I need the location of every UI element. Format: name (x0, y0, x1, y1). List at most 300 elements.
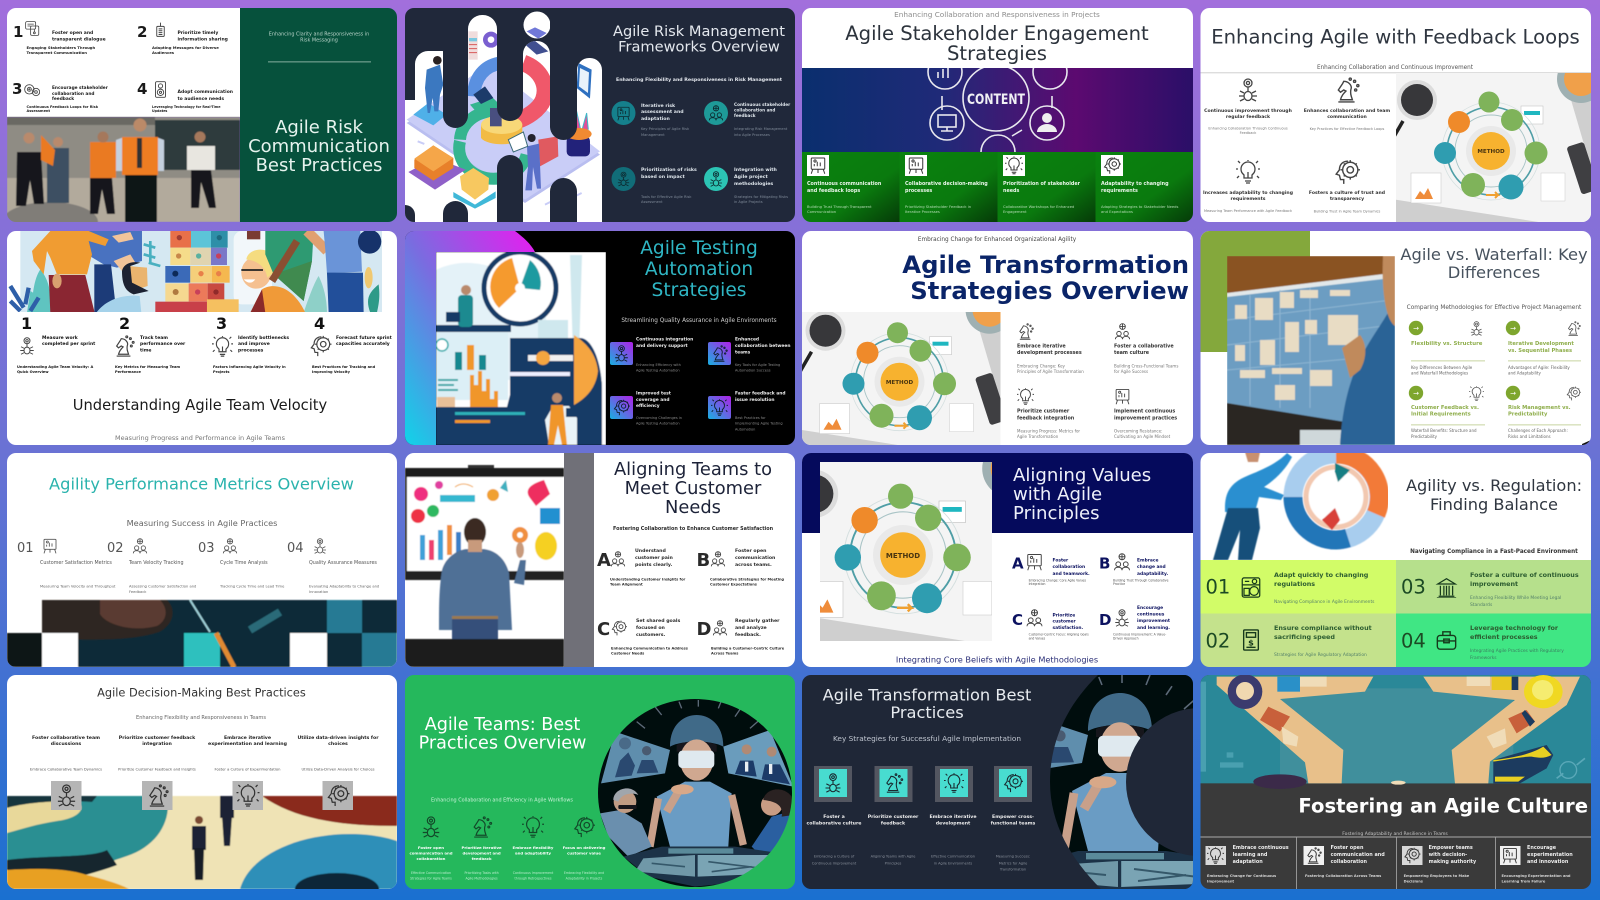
item 2: development and (462, 850, 501, 856)
title: Agile Transformation Best (823, 686, 1031, 704)
item 4 (1500, 845, 1573, 884)
title: Agile vs. Waterfall: Key (1400, 245, 1588, 264)
item 3: Predictability (1411, 434, 1438, 439)
item C: Customer-Centric Focus: Aligning Goals (1029, 632, 1089, 636)
item 3: → (1413, 390, 1419, 398)
item 1: Building Trust Through Transparent (807, 205, 872, 209)
item 2: Aligning Teams with Agile (871, 854, 915, 858)
item 3: Assessment (26, 109, 50, 113)
item 4 (311, 314, 393, 374)
item 4: Adapting Strategies to Stakeholder Needs (1101, 205, 1178, 209)
item 4: Utilize data-driven insights for (297, 735, 379, 741)
metric 04 (287, 539, 379, 594)
item 1: Embrace continuous (1233, 845, 1289, 851)
item 1: and Waterfall Methodologies (1411, 370, 1468, 376)
item D: Regularly gather (735, 618, 780, 624)
item 1: Embrace iterative (1017, 344, 1066, 350)
item D (1099, 605, 1170, 640)
item 3: Decisions (1404, 880, 1423, 884)
item 2: Fostering Collaboration Across Teams (1305, 874, 1381, 878)
item 2 (118, 735, 196, 810)
subtitle: Fostering Adaptability and Resilience in Teams (1342, 831, 1448, 837)
item 4 (1506, 386, 1581, 439)
item 2: collaboration (1331, 859, 1367, 865)
item 2: information sharing (178, 36, 228, 42)
title: Principles (1013, 503, 1100, 524)
item 1: Embracing Change: Key (1017, 364, 1066, 368)
item 1: Embracing a Culture of (814, 854, 855, 858)
item A: Understand (635, 548, 666, 554)
item 4: Cultivating an Agile Mindset (1114, 434, 1171, 439)
item 1 (1204, 79, 1292, 135)
item 4: → (1510, 390, 1516, 398)
item 2: performance over (140, 341, 186, 347)
item 1: Strategies for Agile Teams (410, 876, 452, 880)
photo: planning board (1227, 256, 1395, 445)
item 4 (704, 167, 788, 204)
illustration: analytics dashboard (436, 252, 606, 445)
item D: continuous (1137, 612, 1165, 618)
item A: Understanding Customer Insights for (610, 578, 686, 582)
item A: Foster (1052, 558, 1069, 564)
item 1: Flexibility vs. Structure (1411, 341, 1483, 347)
item 4 (297, 735, 379, 810)
item D: D (1099, 611, 1111, 629)
item D: feedback. (735, 632, 761, 638)
photo: man at whiteboard (405, 465, 564, 667)
title: Strategies (947, 42, 1047, 65)
item 1: Continuous communication (807, 181, 882, 187)
item 02 (1200, 614, 1396, 668)
item 03: improvement (1470, 580, 1518, 588)
item 1: Foster collaborative team (32, 735, 100, 741)
item 4: Focus on delivering (563, 845, 606, 850)
title: Agile Risk Management (613, 23, 785, 40)
item 3 (1402, 845, 1477, 884)
item 1: Iterative risk (641, 103, 676, 109)
photo: method diagram: METHOD (886, 552, 920, 560)
item 4 (991, 766, 1035, 872)
item 1: transparent dialogue (52, 36, 106, 42)
item B: change and (1137, 564, 1166, 570)
item 3: Effective Communication (931, 854, 975, 858)
item 4: Predictability (1508, 412, 1548, 418)
item 2: Principles (885, 862, 902, 866)
illustration: team with blocks (10, 230, 382, 313)
item 3 (929, 766, 977, 866)
item 3: Prioritize customer (1017, 408, 1070, 414)
item 2: Advantages of Agile: Flexibility (1508, 365, 1570, 370)
metric 02: 02 (107, 541, 124, 556)
item 3: Embrace iterative (224, 735, 271, 741)
item 2: feedback (881, 820, 906, 826)
panel: Aligning Teams to Meet Customer Needs (405, 453, 795, 667)
item 1: 1 (21, 314, 32, 333)
item 1: Engaging Stakeholders Through (26, 45, 96, 50)
item 2: Adapting Messages for Diverse (152, 45, 219, 50)
title: Frameworks Overview (618, 38, 780, 56)
metric 01: 01 (17, 541, 34, 556)
item 01: 01 (1206, 576, 1230, 598)
item 3: and adaptability (515, 850, 551, 856)
item D: Encourage (1137, 605, 1163, 611)
green columns (802, 152, 1194, 222)
item 2: Foster a collaborative (1114, 344, 1174, 350)
title: Strategies Overview (910, 276, 1189, 305)
panel: Enhancing Agile with Feedback Loops (1200, 8, 1591, 222)
item 2 (1506, 321, 1581, 376)
title: Meet Customer (625, 478, 762, 499)
title: Agile Testing (640, 238, 758, 259)
item 3: 3 (12, 80, 22, 98)
item 4: Overcoming Resistance: (1114, 428, 1162, 434)
item 4: issue resolution (735, 397, 775, 403)
item D: D (696, 619, 711, 640)
item 3: Improved test (636, 390, 671, 396)
item B: Customer Expectations (710, 582, 757, 586)
title: Aligning Values (1013, 465, 1151, 486)
item 4: customer value (567, 850, 601, 856)
item 4: methodologies (734, 181, 773, 187)
item 3: Continuous Feedback Loops for Risk (26, 105, 99, 109)
item 1 (807, 766, 861, 866)
item 1: completed per sprint (42, 341, 96, 347)
gray band (564, 453, 594, 667)
title: Enhancing Agile with Feedback Loops (1211, 26, 1580, 48)
title: Understanding Agile Team Velocity (73, 397, 328, 414)
item 04: efficient processes (1470, 633, 1538, 641)
item A: customer pain (635, 555, 673, 561)
subtitle: Enhancing Collaboration and Continuous Improvement (1317, 65, 1474, 71)
item 3: Customer Feedback vs. (1411, 405, 1479, 411)
item 1: → (1413, 324, 1419, 332)
title: Aligning Teams to (614, 459, 772, 480)
item 04: 04 (1401, 630, 1426, 652)
item 03 (1396, 560, 1591, 614)
item 3: Empower teams (1429, 845, 1473, 851)
item 4 (137, 80, 233, 113)
photo: method diagram: METHOD (886, 380, 913, 386)
item B: communication (735, 555, 775, 561)
item 1: Foster open and (52, 30, 93, 36)
item 3: Agile Transformation (1017, 434, 1059, 439)
item 3: Encourage stakeholder (52, 85, 109, 91)
item D: and learning. (1137, 625, 1170, 631)
item B: B (1099, 554, 1110, 572)
title: Needs (665, 497, 721, 518)
item A: and teamwork. (1052, 571, 1090, 577)
item C: C (597, 619, 610, 640)
item 2: Prioritize iterative (461, 845, 502, 850)
item 3: 3 (216, 314, 227, 333)
item B (696, 548, 785, 586)
item 2: collaboration and (734, 108, 775, 112)
item 3: Factors Influencing Agile Velocity in (213, 365, 286, 369)
item 03: 03 (1401, 576, 1426, 598)
item 4: Updates (152, 109, 167, 113)
metric 04: Quality Assurance Measures (309, 560, 377, 566)
gradient shape (405, 231, 535, 445)
panel: Agile Testing Automation Strategies (405, 231, 795, 445)
item A: Integration (1029, 582, 1045, 586)
panel: Agile Transformation Best Practices (802, 623, 1278, 900)
item 3: requirements (1230, 196, 1266, 202)
panel: Agile Risk Communication Best Practices (2, 8, 397, 242)
title: Agility Performance Metrics Overview (49, 474, 354, 494)
item 3 (612, 167, 697, 204)
item 4 (563, 817, 606, 880)
item B: adaptability. (1137, 571, 1168, 577)
item 1 (13, 22, 106, 55)
metric 04: Innovation (309, 590, 328, 594)
metric 02: Feedback (129, 590, 147, 594)
item 4: 4 (314, 314, 325, 333)
item 2 (1304, 78, 1390, 131)
item 4: Adaptability to changing (1101, 181, 1169, 187)
item 2: Integrating Risk Management (734, 127, 788, 131)
item 1: Improvement (1207, 880, 1234, 884)
item 01: Adapt quickly to changing (1274, 571, 1369, 579)
item 03: Enhancing Flexibility While Meeting Legal (1470, 595, 1561, 601)
item 2: collaboration between (735, 343, 791, 349)
subtitle: Key Strategies for Successful Agile Implementation (833, 734, 1021, 743)
item 2 (1114, 324, 1178, 374)
item 3 (1409, 386, 1485, 439)
item 2: feedback (472, 856, 492, 861)
subtitle: Streamlining Quality Assurance in Agile Environments (621, 318, 777, 324)
item D: Driven Approach (1113, 636, 1139, 640)
item 3: collaboration and (52, 91, 94, 97)
item 4: transparency (1330, 196, 1364, 202)
subtitle: Risk Messaging (300, 38, 338, 44)
item D (696, 618, 785, 656)
item A: Embracing Change: Core Agile Values (1029, 578, 1087, 582)
title: Differences (1448, 263, 1540, 282)
item 4: Encourage (1527, 845, 1557, 851)
item 4: experimentation (1527, 852, 1573, 858)
photo: team in orange vests (7, 116, 240, 222)
green accent block (1200, 231, 1310, 352)
item 1: Feedback (1240, 131, 1257, 135)
item 4: Best Practices for Tracking and (312, 365, 376, 369)
item C: Customer Needs (611, 652, 644, 656)
item 3: making authority (1429, 859, 1477, 865)
item 3: efficiency (636, 403, 660, 409)
item 1: Effective Communication (411, 871, 451, 875)
item 3: Tools for Effective Agile Risk (640, 195, 692, 199)
item 2: processes (905, 188, 932, 194)
item 2: Key Metrics for Measuring Team (115, 365, 180, 369)
item C: satisfaction. (1052, 625, 1084, 631)
item 1: Foster a (823, 814, 845, 820)
item 2: integration (142, 741, 172, 747)
item 3: Increases adaptability to changing (1203, 190, 1293, 196)
item C: focused on (636, 625, 665, 631)
illustration: person and ring (1213, 452, 1380, 560)
item 1 (17, 314, 96, 374)
item 3: needs (1003, 188, 1019, 194)
item 3: Initial Requirements (1411, 412, 1471, 418)
item 1 (1017, 324, 1084, 374)
item 1: Understanding Agile Team Velocity: A (17, 365, 93, 369)
item 4: Forecast future sprint (336, 335, 393, 341)
item 04: Leverage technology for (1470, 624, 1559, 632)
photo: method diagram: METHOD (1477, 149, 1505, 155)
item 01: regulations (1274, 580, 1315, 588)
item 2 (905, 155, 988, 214)
photo: method diagram (690, 222, 1110, 542)
item 4: Best Practices for (735, 416, 766, 420)
item 4: Improving Velocity (312, 370, 351, 374)
title: Finding Balance (1430, 495, 1558, 514)
item 4: requirements (1101, 188, 1138, 194)
panel: Agility Performance Metrics Overview (7, 453, 397, 667)
panel: Agile Teams Best Practices Overview (405, 657, 828, 900)
item 1: learning and (1233, 852, 1268, 858)
item 2: Prioritize Customer Feedback and Insights (118, 768, 196, 772)
item D: Continuous Improvement: A Value- (1113, 632, 1166, 636)
item 2: teams (735, 350, 751, 356)
item 1: collaborative culture (807, 820, 861, 826)
item 2: Prioritizing Tasks with (464, 871, 499, 875)
green title panel (240, 8, 397, 222)
item 4: choices (328, 741, 348, 747)
item 2: Prioritizing Stakeholder Feedback in (905, 205, 972, 209)
item 1: and delivery support (636, 343, 688, 349)
panel: Agile vs. Waterfall (1200, 231, 1591, 446)
item 2: Continuous stakeholder (734, 102, 791, 107)
item 1: Transparent Communication (26, 50, 87, 55)
item C: customers. (636, 632, 666, 638)
subtitle: Measuring Progress and Performance in Agile Teams (115, 434, 286, 442)
item 4: Embracing Flexibility and (564, 871, 604, 875)
item 3: coverage and (636, 397, 669, 403)
item 3: experimentation and learning (208, 741, 287, 747)
illustration: wooden arms on teal (1200, 674, 1592, 789)
panel: Agile Transformation Strategies Overview (690, 222, 1193, 542)
illustration: path through abstract landscape (7, 796, 397, 900)
item 1: Continuous improvement through (1204, 108, 1292, 114)
item 2: vs. Sequential Phases (1508, 348, 1572, 354)
item C: Prioritize (1052, 612, 1075, 618)
item 3: through Retrospectives (514, 876, 552, 880)
item D: Across Teams (711, 652, 738, 656)
item 4: Leveraging Technology for Real-Time (152, 105, 221, 109)
item 3 (1203, 160, 1293, 213)
item B: across teams. (735, 562, 772, 568)
item B: B (696, 550, 710, 571)
item 2: Collaborative decision-making (905, 181, 988, 187)
item 3: Prioritization of stakeholder (1003, 181, 1081, 187)
item 4: Automation (735, 428, 755, 432)
item 3: Embrace iterative (929, 814, 977, 820)
panel: Fostering an Agile Culture (1200, 674, 1592, 889)
item 4: Risk Management vs. (1508, 405, 1571, 411)
item 3: Assessment (641, 200, 663, 204)
item 1: Quick Overview (17, 370, 49, 374)
title: Best Practices (256, 155, 382, 176)
item 4: functional teams (991, 820, 1035, 826)
photo: method diagram (651, 363, 1155, 747)
item 4: Implement continuous (1114, 408, 1175, 414)
item 2: Iterative Processes (905, 210, 940, 214)
item 3: Empowering Employees to Make (1404, 874, 1470, 878)
item 3: feedback integration (1017, 416, 1075, 422)
item 1: Embrace Collaborative Team Dynamics (30, 768, 102, 772)
item 04 (1396, 614, 1591, 668)
item 1: adaptation (1233, 859, 1263, 865)
item 1 (409, 817, 453, 880)
item 3: Embrace flexibility (513, 845, 554, 850)
item 1: collaboration (417, 856, 446, 861)
metric 03: 03 (198, 541, 215, 556)
item 2 (115, 314, 186, 374)
metric 01: Customer Satisfaction Metrics (40, 560, 112, 566)
metric 03: Cycle Time Analysis (220, 560, 268, 566)
metric 02 (107, 539, 196, 594)
content cycle graphic: CONTENT (967, 92, 1025, 108)
panel: Understanding Agile Team Velocity (7, 230, 397, 445)
subtitle: Enhancing Flexibility and Responsiveness in Risk Management (616, 77, 783, 83)
item A: points clearly. (635, 562, 672, 568)
subtitle: Enhancing Clarity and Responsiveness in (269, 32, 369, 38)
item 4: Learning from Failure (1502, 880, 1546, 884)
item 1 (807, 155, 882, 214)
item 1: adaptation (641, 116, 670, 122)
item 2: for Agile Success (1114, 369, 1148, 374)
title: Agile Decision-Making Best Practices (97, 686, 306, 700)
item 1 (612, 101, 690, 137)
item 3: Collaborative Workshops for Enhanced (1003, 205, 1074, 209)
item C: customer (1052, 618, 1077, 624)
item 3: Overcoming Challenges in (636, 416, 682, 420)
image: pen and checkers (7, 600, 397, 667)
item 03: Standards (1470, 602, 1493, 608)
item 1: assessment and (641, 109, 684, 115)
panel: Agile Decision-Making Best Practices (7, 675, 397, 900)
metric 02: Assessing Customer Satisfaction and (129, 584, 196, 588)
item 2: communication (1327, 114, 1367, 120)
metric 03 (198, 539, 285, 588)
item 4: capacities accurately (336, 341, 390, 347)
item 2: Enhances collaboration and team (1304, 108, 1390, 114)
item 01 (1200, 560, 1396, 614)
item 2 (137, 23, 228, 55)
item 1: and feedback loops (807, 188, 860, 194)
item 1: Embracing Change for Continuous (1207, 874, 1276, 878)
item 2: feedback (734, 113, 756, 118)
item 4: Agile project (734, 174, 768, 180)
item 4: Measuring Success: (996, 854, 1030, 858)
item 3: Foster a Culture of Experimentation (215, 768, 281, 772)
item 2: into Agile Processes (734, 133, 770, 137)
item 3: Measuring Team Performance with Agile Feedback (1204, 209, 1293, 213)
title: Automation (645, 259, 753, 280)
item 4: Encouraging Experimentation and (1502, 874, 1571, 878)
item 04: Integrating Agile Practices with Regulatory (1470, 648, 1564, 654)
item B: Building Trust Through Collaborative (1113, 578, 1169, 582)
item 2: 2 (137, 23, 147, 41)
item 3: based on impact (641, 174, 685, 180)
item 4: Risks and Limitations (1508, 434, 1551, 439)
item 2: Prioritize customer (868, 814, 919, 820)
item 1: 1 (13, 23, 23, 41)
item B: Collaborative Strategies for Meeting (710, 578, 785, 582)
item 3: with decision- (1429, 852, 1467, 858)
item 4: and innovation (1527, 859, 1569, 865)
subtitle: Enhancing Collaboration and Responsiveness in Projects (894, 10, 1100, 19)
item 1: Continuous Improvement (812, 862, 857, 866)
